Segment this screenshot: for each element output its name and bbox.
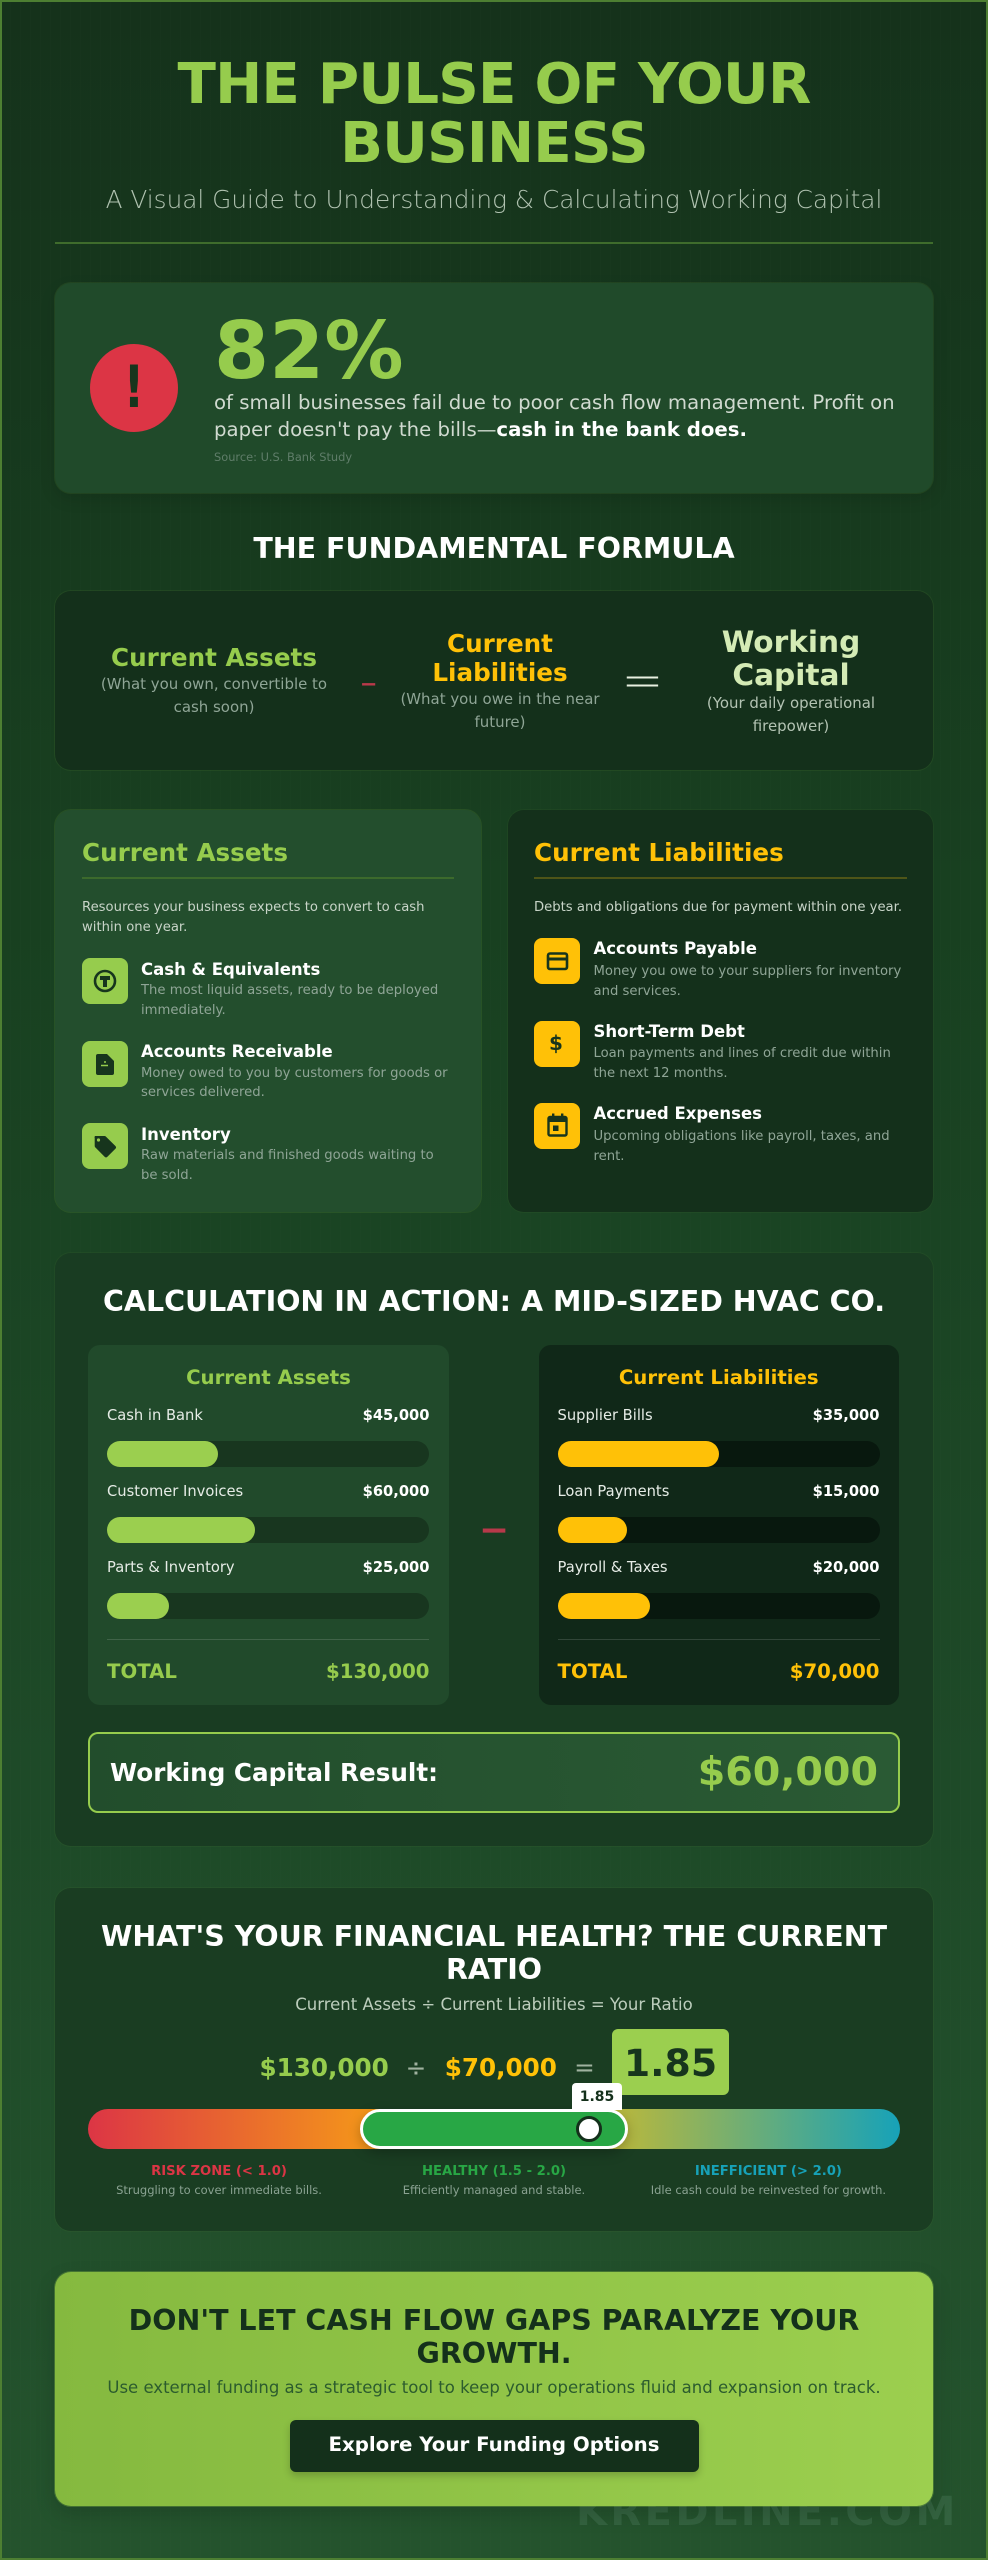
term: working capital: Working [722, 624, 860, 658]
item: payable [534, 938, 901, 999]
heading: WHAT'S YOUR FINANCIAL HEALTH? THE CURRENT [101, 1920, 887, 1953]
icon: card [534, 938, 580, 984]
heading: fundamental formula: THE FUNDAMENTAL FORMULA [253, 532, 735, 565]
equation: $130,000 [260, 2053, 389, 2082]
item: payable: Accounts Payable [594, 939, 757, 958]
panel: current ratio [55, 1888, 933, 2231]
healthy range [360, 2109, 628, 2149]
sub-panel: assets breakdown: $130,000 [326, 1660, 430, 1683]
term: working capital: (Your daily operational [707, 694, 875, 712]
stat description: of small businesses fail due to poor cash flow management. Profit on [214, 391, 895, 414]
description: within one year. [82, 920, 187, 935]
result badge: 1.85 [624, 2041, 717, 2085]
sub-panel: liabilities breakdown: $35,000 [813, 1407, 880, 1424]
term: current liabilities: Liabilities [432, 658, 568, 687]
equation: = [574, 2053, 595, 2082]
marker label [572, 2083, 622, 2110]
sub-panel: assets breakdown: Cash in Bank [107, 1407, 203, 1424]
ratio formula text: Current Assets ÷ Current Liabilities = Your Ratio [295, 1995, 693, 2014]
panel: call to action [55, 2272, 933, 2506]
item: accrued [534, 1103, 890, 1164]
description: Use external funding as a strategic tool to keep your operations fluid and expansion on track. [107, 2378, 881, 2397]
header [55, 52, 933, 244]
heading: GROWTH. [416, 2337, 572, 2370]
item: receivable: Accounts Receivable [141, 1042, 333, 1061]
equation [260, 2029, 729, 2095]
item: debt: the next 12 months. [594, 1066, 728, 1081]
heading: RATIO [446, 1953, 542, 1986]
sub-panel: liabilities breakdown: TOTAL [558, 1660, 627, 1683]
panel: key statistic [55, 283, 933, 493]
sub-panel: assets breakdown: Customer Invoices [107, 1483, 243, 1500]
title: THE PULSE OF YOUR [177, 52, 811, 117]
stat description: paper doesn't pay the bills—cash in the bank does. [214, 418, 747, 441]
item: accrued: Upcoming obligations like payroll, taxes, and [594, 1129, 890, 1144]
zone: healthy: HEALTHY (1.5 - 2.0) [422, 2164, 566, 2179]
description: Debts and obligations due for payment within one year. [534, 900, 902, 915]
item: debt: Loan payments and lines of credit due within [594, 1046, 891, 1061]
item: inventory [82, 1123, 434, 1183]
item: receivable: services delivered. [141, 1085, 265, 1100]
icon: dollar: $ [549, 1031, 563, 1055]
item: cash [82, 958, 438, 1018]
sub-panel: assets breakdown [88, 1345, 449, 1705]
item: cash: Cash & Equivalents [141, 960, 320, 979]
item: inventory: Inventory [141, 1125, 231, 1144]
term: current liabilities: Current [447, 629, 553, 658]
result box: Working Capital Result: [110, 1758, 438, 1787]
equation: $70,000 [445, 2053, 557, 2082]
term: current assets [101, 643, 327, 716]
marker [576, 2116, 602, 2142]
term: working capital: Capital [732, 658, 850, 692]
heading: Current Liabilities [534, 838, 784, 867]
icon: document [82, 1041, 128, 1087]
sub-panel: liabilities breakdown: $70,000 [790, 1660, 880, 1683]
zone: inefficient: Idle cash could be reinvested for growth. [651, 2183, 886, 2197]
source: Source: U.S. Bank Study [214, 450, 352, 464]
sub-panel: assets breakdown: Parts & Inventory [107, 1559, 235, 1576]
panel: formula [55, 591, 933, 770]
term: current liabilities [400, 629, 600, 731]
term: working capital: firepower) [753, 717, 829, 735]
icon: dollar [534, 1020, 580, 1066]
gauge [88, 2083, 900, 2152]
item: accrued: Accrued Expenses [594, 1104, 762, 1123]
item: inventory: be sold. [141, 1168, 193, 1183]
term: current liabilities: (What you owe in the near [400, 690, 600, 708]
term: current assets: Current Assets [111, 643, 317, 672]
sub-panel: assets breakdown: $25,000 [363, 1559, 430, 1576]
operator: minus: − [360, 672, 377, 696]
sub-panel: assets breakdown: TOTAL [107, 1660, 177, 1683]
item: debt: Short-Term Debt [594, 1022, 745, 1041]
watermark: KREDLINE.COM [576, 2489, 959, 2535]
zone: healthy: Efficiently managed and stable. [403, 2183, 585, 2197]
icon: coin [82, 958, 128, 1004]
sub-panel: liabilities breakdown: Payroll & Taxes [558, 1559, 668, 1576]
item: receivable: Money owed to you by customers for goods or [141, 1066, 448, 1081]
icon: calendar [534, 1103, 580, 1149]
item: cash: The most liquid assets, ready to be deployed [141, 983, 438, 998]
heading: DON'T LET CASH FLOW GAPS PARALYZE YOUR [129, 2304, 859, 2337]
stat number: 82% [214, 304, 404, 397]
zone: risk: Struggling to cover immediate bills. [116, 2183, 322, 2197]
icon: tag [82, 1123, 128, 1169]
sub-panel: assets breakdown: Current Assets [186, 1366, 351, 1389]
icon: alert [90, 344, 178, 432]
term: working capital [707, 624, 875, 735]
zone: healthy [403, 2164, 585, 2197]
button: Explore Your Funding Options [328, 2433, 660, 2456]
icon: alert: ! [124, 353, 144, 421]
panel: current liabilities [508, 810, 933, 1212]
result badge [612, 2029, 729, 2095]
sub-panel: assets breakdown: $60,000 [363, 1483, 430, 1500]
marker label: 1.85 [580, 2089, 614, 2105]
operator: equals: = [622, 651, 663, 709]
heading: CALCULATION IN ACTION: A MID-SIZED HVAC CO. [103, 1285, 885, 1318]
term: current assets: (What you own, convertible to [101, 675, 327, 693]
item: debt [534, 1021, 891, 1081]
sub-panel: assets breakdown: $45,000 [363, 1407, 430, 1424]
result box: $60,000 [698, 1749, 878, 1795]
operator: minus: − [479, 1510, 509, 1551]
panel: calculation in action [55, 1253, 933, 1846]
item: accrued: rent. [594, 1149, 624, 1164]
term: current liabilities: future) [475, 713, 525, 731]
item: payable: Money you owe to your suppliers for inventory [594, 964, 901, 979]
sub-panel: liabilities breakdown: Supplier Bills [558, 1407, 653, 1424]
stat description [214, 391, 895, 441]
heading [129, 2304, 859, 2370]
title [177, 52, 811, 176]
item: cash: immediately. [141, 1003, 226, 1018]
term: current assets: cash soon) [174, 698, 254, 716]
description [82, 900, 425, 935]
zone: risk: RISK ZONE (< 1.0) [151, 2164, 287, 2179]
button [290, 2420, 698, 2472]
title: BUSINESS [340, 111, 648, 176]
item: payable: and services. [594, 984, 681, 999]
sub-panel: liabilities breakdown: $20,000 [813, 1559, 880, 1576]
equation: ÷ [406, 2053, 426, 2082]
panel: current assets [55, 810, 481, 1212]
heading [101, 1920, 887, 1986]
item: inventory: Raw materials and finished goods waiting to [141, 1148, 434, 1163]
description: Resources your business expects to convert to cash [82, 900, 425, 915]
zone: inefficient: INEFFICIENT (> 2.0) [695, 2164, 842, 2179]
subtitle: A Visual Guide to Understanding & Calculating Working Capital [106, 185, 882, 214]
sub-panel: liabilities breakdown: Current Liabilities [619, 1366, 819, 1389]
sub-panel: liabilities breakdown [538, 1345, 899, 1705]
sub-panel: liabilities breakdown: $15,000 [813, 1483, 880, 1500]
result box [88, 1732, 900, 1813]
sub-panel: liabilities breakdown: Loan Payments [558, 1483, 669, 1500]
zone: inefficient [651, 2164, 886, 2197]
heading: Current Assets [82, 838, 288, 867]
item: receivable [82, 1041, 448, 1100]
zone: risk [116, 2164, 322, 2197]
